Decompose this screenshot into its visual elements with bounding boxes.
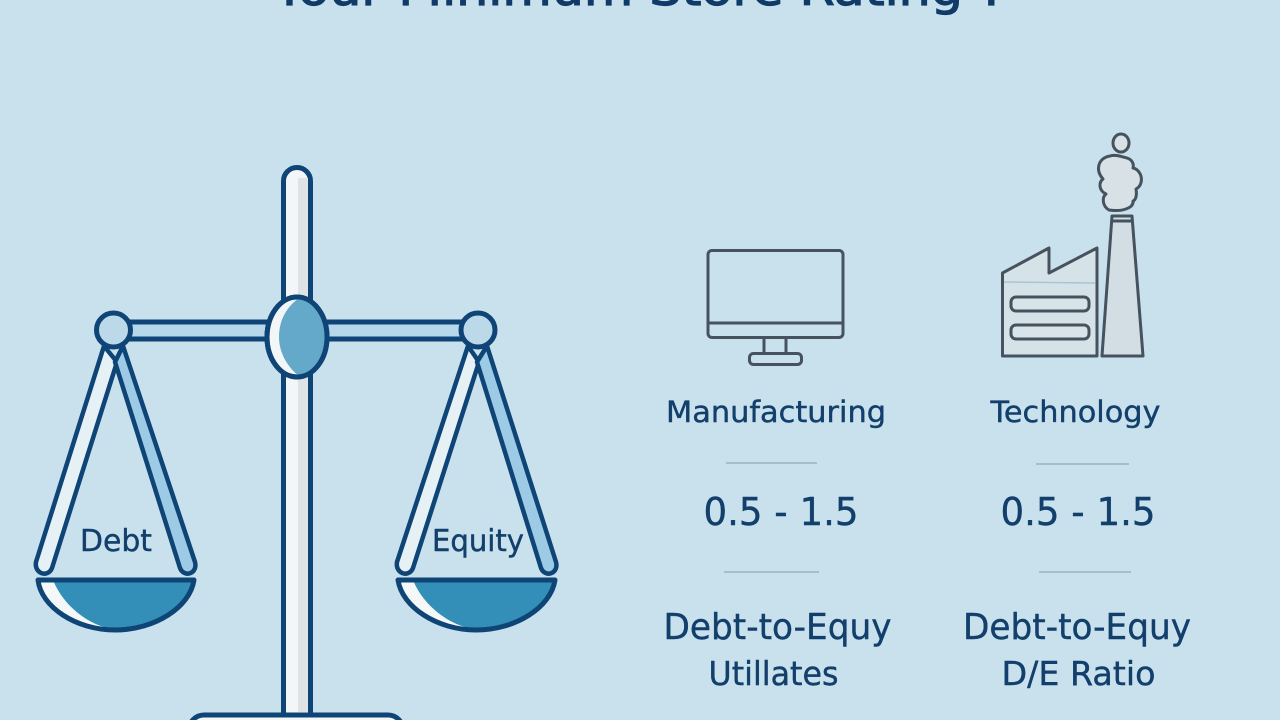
label: debt: Debt xyxy=(80,524,152,559)
left pivot xyxy=(96,313,130,347)
balance scale illustration xyxy=(36,168,556,720)
label: equity: Equity xyxy=(432,524,524,559)
scale beam xyxy=(125,322,467,339)
right pan xyxy=(397,580,555,630)
left pan hangers xyxy=(36,346,195,574)
scale pole xyxy=(284,168,310,720)
value: manufacturing range: 0.5 - 1.5 xyxy=(704,490,858,534)
column: manufacturing xyxy=(664,395,892,693)
label: utilities: Utillates xyxy=(708,654,838,693)
label: technology ratio: Debt-to-Equy xyxy=(963,607,1191,648)
icon: computer monitor xyxy=(708,250,843,364)
right pan hangers xyxy=(397,346,556,574)
left pan xyxy=(37,580,194,630)
label: D/E ratio: D/E Ratio xyxy=(1002,654,1156,693)
column: technology xyxy=(963,395,1191,693)
heading: technology: Technology xyxy=(989,395,1160,429)
label: manufacturing ratio: Debt-to-Equy xyxy=(664,607,892,648)
icon: factory with smoke xyxy=(1002,134,1143,356)
heading: manufacturing: Manufacturing xyxy=(666,395,886,429)
right pivot xyxy=(461,313,495,347)
scale hub xyxy=(267,297,327,377)
scale base xyxy=(189,715,403,720)
value: technology range: 0.5 - 1.5 xyxy=(1000,490,1156,534)
